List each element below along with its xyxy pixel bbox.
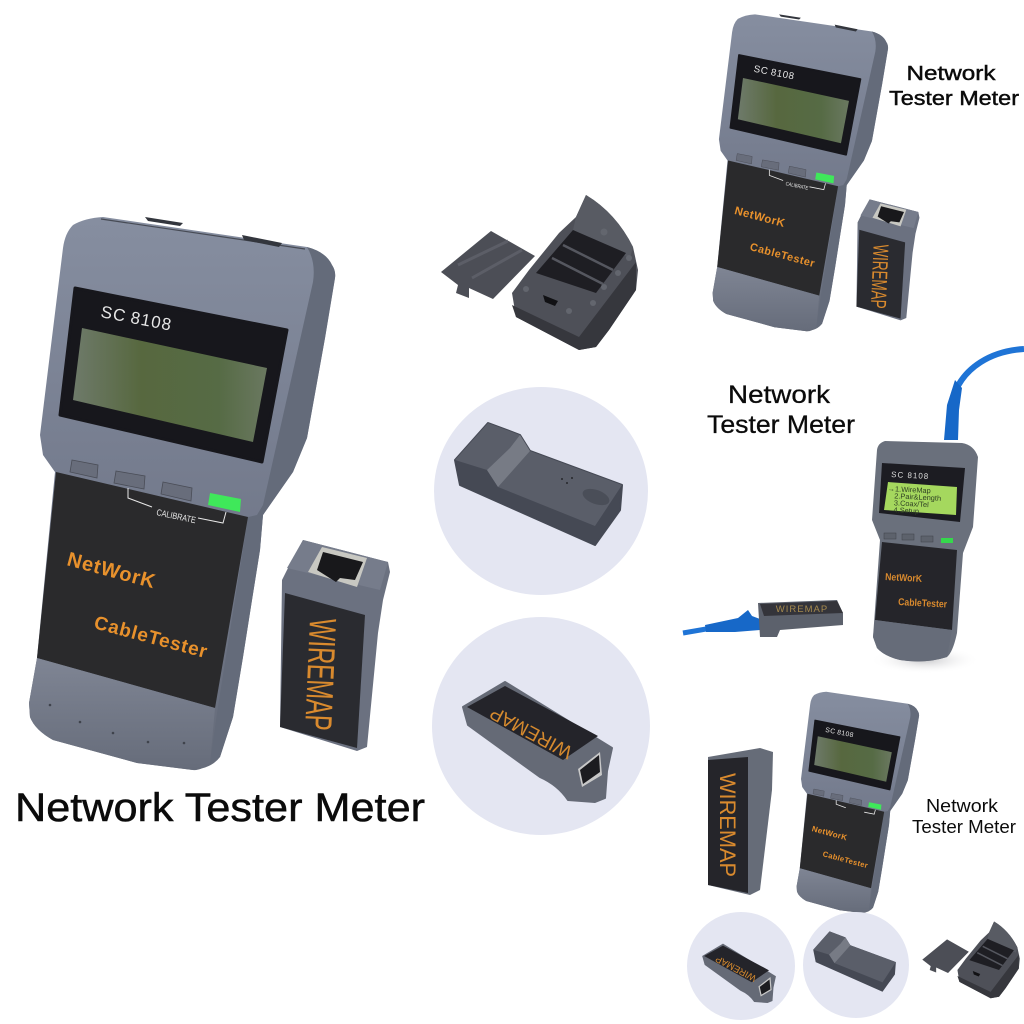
circle backdrop	[687, 912, 795, 1020]
right side shading	[869, 704, 919, 910]
calibrate bracket	[836, 800, 875, 814]
housing bumps	[523, 228, 632, 314]
calibrate bracket	[128, 488, 226, 523]
housing slot	[973, 971, 980, 976]
network label: NetWorK	[65, 549, 158, 593]
lcd screen	[884, 482, 957, 515]
tester body	[872, 441, 978, 661]
remote rj45 port	[308, 547, 367, 587]
display bezel	[60, 288, 287, 462]
housing slot	[543, 295, 558, 306]
green button	[868, 802, 881, 810]
green button	[941, 538, 953, 543]
battery compartment and cover	[441, 195, 638, 350]
remote port opening	[878, 206, 904, 223]
remote underside	[813, 931, 896, 992]
remote wiremap label: WIREMAP	[296, 618, 343, 731]
network label: NetWorK	[885, 572, 923, 585]
main product photo: tester and remote	[29, 217, 390, 770]
remote body	[463, 682, 612, 802]
bottom band	[713, 267, 819, 331]
wiremap label: WIREMAP	[715, 773, 740, 877]
bottom vertical remote	[708, 748, 773, 895]
remote upper face	[813, 931, 896, 982]
black face	[467, 686, 598, 760]
wiremap label: WIREMAP	[713, 954, 758, 984]
circle backdrop	[434, 387, 648, 595]
top-right title	[889, 63, 1019, 110]
rj45 port	[759, 978, 771, 996]
middle title	[707, 381, 855, 439]
housing lower front	[957, 955, 1019, 998]
function buttons	[813, 789, 862, 805]
battery bay ribs	[552, 245, 613, 284]
remote underside	[455, 423, 622, 545]
cable tester label: CableTester	[822, 849, 869, 870]
model label: SC 8108	[825, 727, 854, 739]
calibrate bracket	[769, 170, 825, 190]
remote black face	[280, 593, 365, 748]
cable tester label: CableTester	[749, 241, 817, 270]
small battery compartment	[922, 922, 1020, 998]
bottom tester photo	[797, 692, 919, 913]
housing lower front	[512, 262, 636, 350]
cover ridges	[458, 241, 522, 278]
top seam	[101, 219, 305, 249]
shadow	[870, 646, 980, 674]
rj45 port opening	[580, 755, 600, 784]
right side shading	[816, 32, 888, 327]
remote black face	[856, 230, 905, 319]
display bezel	[879, 463, 965, 522]
tester body	[713, 14, 888, 331]
bottom title: Network	[926, 796, 999, 816]
top-right title: Tester Meter	[889, 88, 1019, 110]
middle remote with cable	[683, 600, 843, 637]
bottom band	[29, 658, 215, 770]
remote sloped section	[829, 937, 850, 963]
tester body	[797, 692, 919, 913]
bottom title: Tester Meter	[912, 817, 1016, 837]
right side shading	[210, 247, 335, 763]
circle photo: front of remote	[432, 617, 650, 835]
circle backdrop	[432, 617, 650, 835]
cable tester label: CableTester	[92, 613, 210, 663]
remote top face	[760, 601, 843, 616]
network label: NetWorK	[733, 205, 787, 230]
model label: SC 8108	[891, 470, 929, 481]
battery cover	[441, 231, 535, 299]
remote top face	[860, 199, 918, 228]
small circle: back of remote	[803, 912, 909, 1018]
remote rj45 port	[872, 203, 906, 226]
blue cable left	[683, 628, 712, 633]
remote unit body	[856, 199, 919, 320]
remote sloped section	[487, 435, 530, 487]
green button	[208, 493, 241, 512]
circle backdrop	[803, 912, 909, 1018]
black front panel	[37, 472, 248, 708]
main title: Network Tester Meter	[15, 786, 425, 830]
calibrate label: CALIBRATE	[785, 181, 809, 192]
green button	[815, 172, 834, 183]
network label: NetWorK	[811, 824, 848, 842]
black face	[708, 757, 748, 893]
battery bay	[969, 939, 1014, 970]
top connector ports	[779, 14, 858, 32]
remote upper face	[455, 423, 622, 526]
model label: SC 8108	[753, 64, 795, 82]
top connector ports	[145, 217, 282, 247]
lcd screen	[814, 736, 892, 782]
bottom band	[873, 620, 952, 661]
top-right title: Network	[906, 63, 997, 85]
middle title: Network	[728, 381, 831, 409]
lcd menu: 4.Setup	[893, 505, 919, 516]
wiremap label: WIREMAP	[487, 701, 576, 762]
battery bay	[536, 230, 626, 293]
housing flap	[573, 195, 633, 258]
function buttons	[884, 533, 933, 542]
remote top face	[287, 540, 388, 590]
lcd menu	[886, 484, 942, 517]
tester body	[29, 217, 335, 770]
lcd screen	[738, 78, 849, 143]
battery cover	[922, 939, 969, 973]
circle photo: back of remote	[434, 387, 648, 595]
black front panel	[875, 542, 957, 630]
bottom dots	[49, 704, 185, 744]
thumb recess	[580, 486, 612, 508]
battery housing	[957, 922, 1020, 998]
remote body	[708, 748, 773, 895]
remote port opening	[317, 552, 363, 582]
remote body	[758, 600, 843, 637]
black face	[704, 946, 769, 982]
top-right tester photo	[713, 14, 919, 331]
blue cable boot	[705, 610, 760, 632]
black front panel	[800, 794, 884, 888]
battery housing	[512, 195, 638, 350]
speaker holes	[561, 477, 573, 484]
bottom title	[912, 796, 1016, 837]
display bezel	[809, 720, 900, 790]
lcd menu: 3.Coax/Tel	[894, 498, 929, 509]
function buttons	[70, 460, 192, 501]
remote body	[702, 944, 776, 1003]
bottom band	[797, 868, 871, 913]
blue cable right	[955, 349, 1024, 392]
function buttons	[736, 154, 806, 177]
middle title: Tester Meter	[707, 411, 855, 439]
lcd menu: →1.WireMap	[887, 484, 931, 495]
small circle: front of remote	[687, 912, 795, 1020]
remote unit body	[280, 540, 390, 751]
housing flap	[988, 922, 1017, 953]
display bezel	[730, 55, 860, 155]
rj45 port frame	[578, 752, 602, 787]
calibrate label: CALIBRATE	[156, 507, 197, 525]
black front panel	[717, 160, 838, 296]
remote piece	[813, 931, 896, 992]
middle tester with cables	[870, 349, 1024, 674]
remote wiremap label: WIREMAP	[866, 244, 894, 309]
wiremap label: WIREMAP	[776, 604, 828, 615]
cable tester label: CableTester	[898, 597, 947, 611]
battery bay ribs	[977, 946, 1007, 966]
lcd screen	[73, 328, 267, 442]
model label: SC 8108	[99, 302, 174, 335]
blue cable boot	[944, 380, 962, 440]
lcd menu: 2.Pair&Length	[894, 491, 941, 503]
